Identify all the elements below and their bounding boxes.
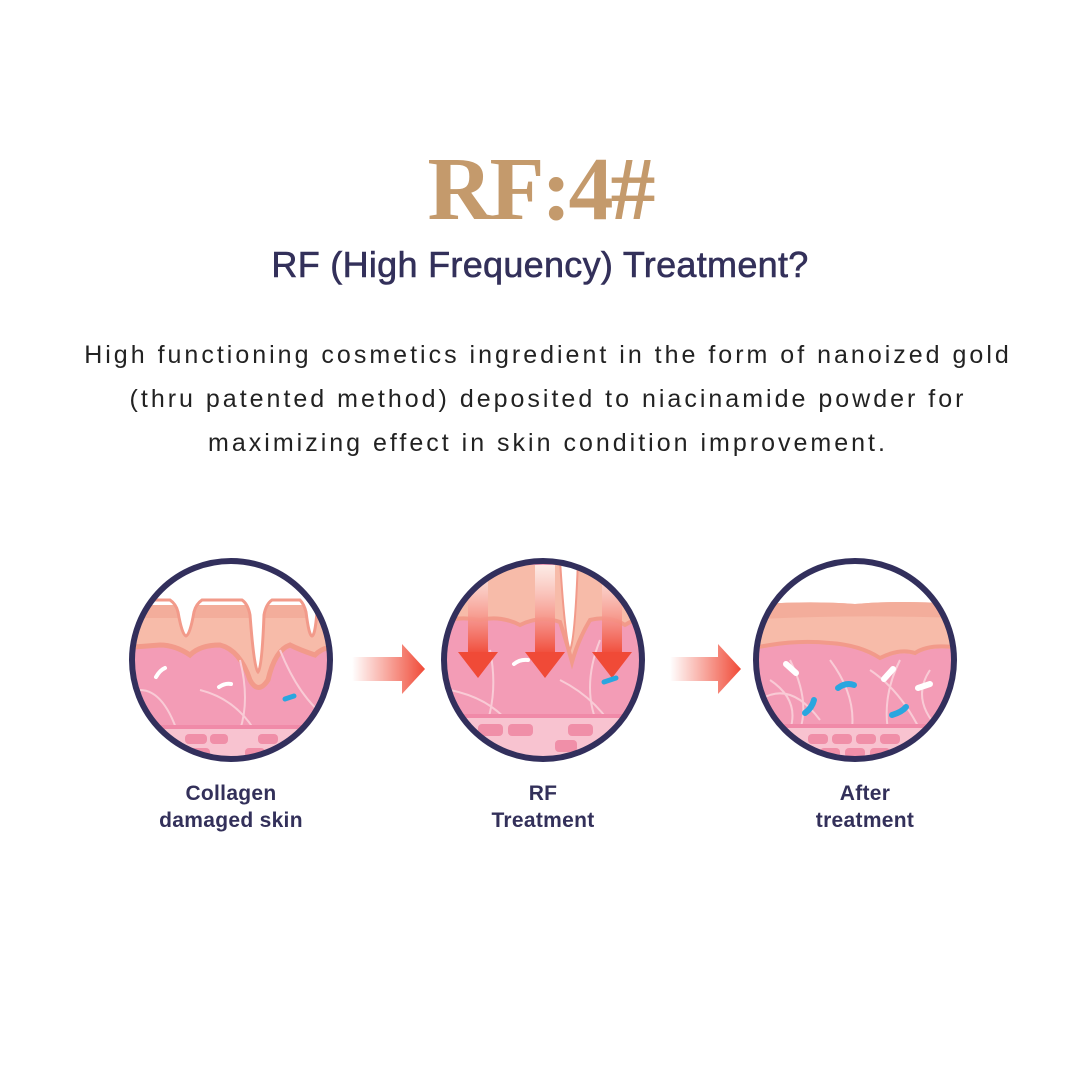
- label: after treatment: After: [840, 782, 890, 805]
- description: [84, 341, 1012, 457]
- label: RF treatment: Treatment: [491, 809, 595, 832]
- subtitle: RF (High Frequency) Treatment?: [271, 244, 809, 285]
- label: RF treatment: [491, 782, 595, 832]
- arrow 2: [670, 644, 741, 694]
- label: after treatment: treatment: [816, 809, 914, 832]
- description: maximizing effect in skin condition improvement.: [208, 429, 888, 457]
- description: High functioning cosmetics ingredient in the form of nanoized gold: [84, 341, 1012, 369]
- diagram: [129, 558, 957, 762]
- label: collagen damaged skin: damaged skin: [159, 809, 303, 832]
- circle: RF treatment: [441, 558, 645, 762]
- label: after treatment: [816, 782, 914, 832]
- description: (thru patented method) deposited to niacinamide powder for: [130, 385, 966, 413]
- circle: after treatment: [753, 558, 957, 762]
- label: collagen damaged skin: Collagen: [185, 782, 277, 805]
- wrinkles: [155, 598, 318, 674]
- arrow 1: [352, 644, 425, 694]
- circle: collagen damaged skin: [129, 558, 333, 762]
- title: RF:4#: [428, 140, 652, 239]
- label: RF treatment: RF: [529, 782, 557, 805]
- label: collagen damaged skin: [159, 782, 303, 832]
